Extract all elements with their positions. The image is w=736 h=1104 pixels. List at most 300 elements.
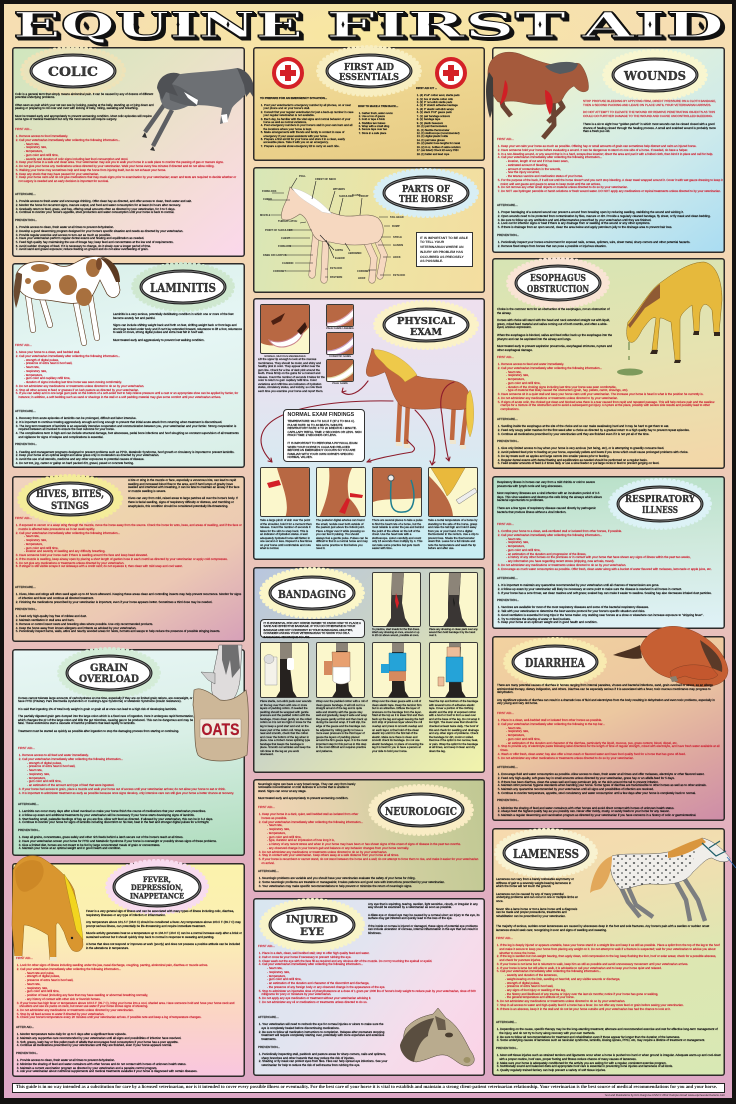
- text: colic aftercare and prevention: 7. Avoid sand and gravel exposure; reduce feeding on ground and do not allow overfeeding of grain.: [16, 247, 149, 251]
- text: wounds first aid: - the tetanus vaccine and medication status of your horse.: [506, 174, 583, 178]
- text: lameness note: The majority of serious, sudden onset lamenesses are caused by abscesses deep in the foot and sole fractures. Any horse's pain with a swollen or sudden onset lameness should seek care; recognizing it soon and signs of swelling and sweating.: [496, 924, 709, 932]
- text: diarrhea intro: Any significant episode of diarrhea can result in a dramatic loss of fluid and electrolytes from the body resulting in dehydration and even toxic problems, especially in very young and very old horse.: [497, 698, 715, 705]
- text: colic intro: [15, 92, 154, 121]
- text: colic first aid: 3. Keep your horse in a safe and clean area. Your veterinarian may ask you to walk your horse in a safe place to monitor the passing of gas or manure signs.: [16, 160, 224, 164]
- text: lameness aftercare and prevention: 2. Be sure to follow all recommendations for treatment and rehabilitation even if those appear far longer than the duration of the lameness.: [497, 1035, 680, 1039]
- badge: esophagus obstruction: [508, 259, 608, 307]
- badge: parts of the horse: [375, 170, 477, 216]
- illustrations: esophagus badge and horse: [492, 258, 725, 469]
- text: fever intro: Any temperature above 101.5 F (38.6 C) should be considered a fever. Any temperature above 103.5 F (39.7 C) may prompt serious illness, can potentially be life-threatening and require immediate treatment.: [86, 920, 241, 928]
- text: respiratory intro: [497, 481, 603, 518]
- text: lameness intro: Lameness can vary from a barely noticeable asymmetry or stiffness of gait to a severely weight-bearing lameness in which the horse will not touch the ground.: [496, 877, 574, 888]
- text: wounds warning: STOP PROFUSE BLEEDING BY APPLYING FIRM, DIRECT PRESSURE ON A CLOTH BANDAGE, THEN A SECOND PACKING AND LEAVE ON PLACE UNTIL YOUR VETERINARIAN ARRIVES.: [583, 99, 716, 107]
- text: fever intro: Muscle activity generates heat so a temperature up to 104.0 F (40.0 C) can be a normal increase early after a brisk or sustained workout but it should quickly drop back to normal in response to sweating and panting.: [86, 931, 242, 939]
- text: diarrhea aftercare and prevention: 1. Minimize the sharing of feed and water containers with other horses and avoid direct contact with horses of unknown health status.: [498, 806, 674, 810]
- diagram: part labels: CHEEK: [263, 197, 272, 201]
- illustrations: lameness badge and horse: [492, 828, 725, 1076]
- text: injured eye first aid: 2. Halt or cross tie your horse if necessary to prevent rubbing the eye.: [259, 955, 351, 959]
- panel: stethoscope exam: [372, 467, 422, 517]
- text: laminitis first aid: [15, 343, 238, 399]
- text: grain overload intro: [18, 696, 194, 733]
- diagram: part labels: POINT OF SHOULDER: [265, 228, 293, 232]
- text: grain overload aftercare and prevention: 1. Laminitis can occur many days after a feed overload so make your horse finish the course of medications that your veterinarian prescribes.: [19, 809, 206, 813]
- text: grain overload first aid: - presence of extra heat in hoof wall,: [27, 764, 75, 768]
- text: leg captions: To practice, start treads for the first dress. Wash any dressing at once, around or up to 20 cm above wound, possible at soon.: [372, 628, 420, 637]
- text: lameness aftercare and prevention: 4. Quality regularly trained farriery can help prevent a variety of soft tissue injuries.: [497, 1068, 606, 1072]
- text: diarrhea first aid: 1. Place in a clean, well-bedded stall or isolated from other horses as possible.: [498, 718, 602, 722]
- text: wounds aftercare and prevention: AFTERCARE...: [497, 203, 518, 207]
- diagram: part labels: CHEST: [281, 236, 290, 240]
- text: neurologic first aid: - a history of any recent stress and when in your horse may have been or has shown signs of the onset of signs of disease in the past two months.: [267, 842, 461, 846]
- text: hives aftercare and prevention: 4. Keep the horse away from known allergens and irritants as advised by your veterinarian.: [16, 626, 136, 630]
- text: diarrhea aftercare and prevention: 2. Always feed the highest quality hay as you possibly can. Never offer moldy, musty, or sandy feeds to your horse for any reason.: [498, 809, 670, 813]
- text: lameness first aid: FIRST AID...: [496, 936, 513, 940]
- text: laminitis first aid: - temperature,: [24, 373, 43, 377]
- text: wounds aftercare and prevention: 3. Be sure to follow up any antibiotics and anti-inflammatories prescribed by your veterinarian until they are finished.: [498, 218, 651, 222]
- badge: fever: DEPRESSION,: [131, 883, 183, 892]
- text: lameness aftercare and prevention: PREVENTION...: [496, 1046, 518, 1050]
- text: emergency preparation: 2. Consult first your regular veterinarian for just a back-up number in case your regular veterinarian is not available.: [261, 110, 353, 117]
- badge: grain overload: [59, 649, 159, 697]
- text: laminitis first aid: FIRST AID...: [15, 343, 32, 347]
- icon: horse head in oat sack: [193, 645, 248, 761]
- diagram: part labels: WITHERS: [333, 187, 345, 191]
- text: esophagus first aid: 5. If signs of acute colic, the choked gut clean and blocked area there is a tear caused from rapid and repeated passage. This will help reduce pain and the swallow cramps for a mixture of the obstruction and to avoid a subsequent gut injury. A rupture at the place, possibly with severe side results and possibly lead to other complications.: [498, 400, 714, 411]
- text: lameness intro: Lameness can be caused by any of many potential underlying problems and can occur in one or multiple limbs at once.: [496, 892, 578, 903]
- icon: yellow horse with feed drool: [617, 262, 722, 376]
- text: fever aftercare and prevention: 3. Maintain a current vaccination program as directed by your veterinarian and a parasite control program.: [17, 1066, 157, 1070]
- text: diarrhea aftercare and prevention: 3. Maintain a regular deworming and vaccination program as directed by your veterinarian if you have concerns in a history of colic or gastrointestinal.: [498, 813, 696, 817]
- badge: respiratory illness: RESPIRATORY: [625, 494, 695, 505]
- text: lameness aftercare and prevention: [496, 1021, 722, 1073]
- text: laminitis aftercare and prevention: 1. Feeding and management programs designed to prevent problems such as PPID, Metabolic Syndrome, hoof growth or circulatory is important to prevent laminitis.: [16, 450, 234, 454]
- badge: wounds: [604, 51, 706, 99]
- text: grain overload intro: It is said that ingesting 1% of total body weight in grain or grain all at once can lead to a high risk of developing laminitis.: [18, 707, 177, 711]
- text: respiratory first aid: 3. Do not administer any medications or treatments unless directed to do so by your veterinarian.: [498, 563, 626, 567]
- diagram: part labels: SHOULDER: [339, 194, 354, 198]
- panel: pastern pulse exam: [316, 467, 366, 517]
- diagram: horse body: [281, 187, 384, 280]
- text: laminitis aftercare and prevention: AFTERCARE...: [15, 409, 36, 413]
- badge: grain overload: GRAIN: [90, 663, 128, 674]
- text: diarrhea aftercare and prevention: 1. Encourage fluid and water consumption as possible. Allow access to clean, fresh water at all times and offer molasses, electrolyte or other flavored water.: [498, 772, 705, 776]
- text: laminitis first aid: - respiratory rate,: [24, 369, 47, 373]
- badge: first aid essentials: FIRST AID: [344, 63, 394, 73]
- text: emergency preparation: 3. Each day, be familiar with the vital signs and normal behavior of your horse as well as normal variations.: [261, 117, 350, 124]
- text: fever aftercare and prevention: 1. Provide access to clean, fresh water at all times to prevent dehydration.: [17, 1058, 115, 1062]
- diagram: part labels: FETLOCK: [330, 266, 342, 270]
- text: laminitis aftercare and prevention: 2. It is important to continue treating aggressively enough and long enough to prevent that initial acute attack from returning when treatment is discontinued.: [16, 420, 222, 424]
- text: fever first aid: - strength of digital pulses,: [25, 974, 60, 978]
- text: colic first aid: 1. Remove access to food immediately.: [16, 134, 68, 138]
- panel: injured eye: [253, 898, 485, 1076]
- text: respiratory aftercare and prevention: PREVENTION...: [497, 598, 519, 602]
- text: colic first aid: - gum color and refill time,: [24, 153, 59, 157]
- badge: esophagus obstruction: ESOPHAGUS: [530, 273, 586, 284]
- text: colic aftercare and prevention: 3. Provide regular exercise and access to turn-out as much as possible.: [16, 233, 111, 237]
- text: fever aftercare and prevention: 4. Ask your veterinarian about nutritional supplements and medical treatments available if your horse is diagnosed with certain diseases.: [17, 1069, 197, 1073]
- text: esophagus aftercare and prevention: 3. Continue all medications prescribed by your veterinarian until they are finished even if it is not yet all of the time.: [498, 432, 649, 436]
- text: injured eye first aid: 4. Call your veterinarian immediately after collecting the following information...: [259, 962, 363, 966]
- text: first aid kit: 17. (as listed) Check kit every PRN: [417, 149, 458, 152]
- text: wounds aftercare and prevention: 5. If there is drainage from an open wound, clean the area below and apply petroleum jelly to the drainage area to prevent hair loss.: [498, 225, 672, 229]
- text: hives first aid: - respiratory rate,: [24, 538, 47, 542]
- text: esophagus first aid: - duration of the choking signs including last time your horse was seen comfortable,: [506, 385, 617, 389]
- callout: normal exam findings: [283, 409, 365, 462]
- text: fever first aid: 2. Call your veterinarian immediately after collecting the following information...: [17, 967, 121, 971]
- text: laminitis first aid: - presence of extra heat in hoof wall,: [24, 361, 72, 365]
- badge: injured eye: [261, 900, 363, 950]
- text: esophagus aftercare and prevention: AFTERCARE...: [497, 417, 518, 421]
- text: grain overload first aid: - respiratory rate,: [27, 772, 50, 776]
- text: esophagus first aid: [497, 356, 721, 412]
- panel: respiratory illness: [492, 476, 725, 629]
- text: hives first aid: - heart rate,: [24, 534, 40, 538]
- text: esophagus first aid: 1. Remove access to feed and water immediately.: [498, 362, 564, 366]
- text: grain overload aftercare and prevention: 1. Keep all grains, concentrates, grass safely and other rich feeds behind a latch secure out of the horse's reach at all times.: [19, 835, 183, 839]
- badge: colic: COLIC: [48, 65, 98, 80]
- text: neurologic first aid: - gum color and refill time,: [267, 835, 302, 839]
- text: colic first aid: - heart rate,: [24, 142, 40, 146]
- text: neurologic aftercare: 2. Some neurologic problems are treatable or manageable; it takes patience and good care with instructions prescribed by your veterinarian.: [259, 880, 445, 884]
- title: FIRST: [326, 5, 566, 46]
- text: laminitis first aid: - strength of digital pulses,: [24, 358, 59, 362]
- text: respiratory aftercare and prevention: AFTERCARE...: [497, 576, 518, 580]
- badge: first aid essentials: [318, 47, 420, 95]
- text: hives aftercare and prevention: 5. Periodically inspect barns, walls, attics and nearby wooded areas for nests, hornets and wasps to help reduce the presence of possible stinging insects.: [16, 629, 220, 633]
- panel: neurologic: [253, 779, 485, 892]
- text: how to make a trim pack: 6. Secure tape over two: [359, 128, 387, 131]
- text: neurologic first aid: [258, 805, 478, 865]
- text: colic first aid: - severity and duration of colic signs including last food consumption and stool.: [24, 157, 128, 161]
- text: neurologic intro: Neurologic signs can have a very broad range. They can vary from barely noticeable incoordination or mild dullness to a horse that is unable to stand. Signs can occur at any stage.: [258, 782, 356, 793]
- text: wounds warning: DO NOT ATTEMPT TO ELEVATE THE WOUND OR REMOVE PENETRATING OBJECTS AS THIS COULD DO FURTHER DAMAGE TO THE WOUND AND CAUSE UNCONTROLLED BLEEDING.: [583, 110, 715, 118]
- text: lameness first aid: - strength of digital pulses,: [505, 980, 540, 984]
- text: injured eye aftercare and prevention: 2. Shading or fly mask can protect eyes from flies. Flies can help spread eye infections. See your veterinarian for help to reduce the risk of self-trauma from rubbing the eye.: [259, 1059, 387, 1067]
- title: AID: [580, 5, 724, 46]
- panel: diarrhea: [492, 636, 725, 821]
- panel: tape step: [429, 642, 478, 698]
- text: laminitis aftercare and prevention: 3. Avoid the use of all steroids, medicine and any other exposures to potential causes of disease.: [16, 457, 144, 461]
- text: fever aftercare and prevention: 2. Minimize the sharing of feed and water containers with other horses and do not contact with horses of unknown health status.: [17, 1062, 186, 1066]
- text: individual normals: IT IS IMPORTANT TO PERFORM A PHYSICAL EXAM WHEN YOUR HORSE IS CALM AND RELAXED BEFORE AN EMERGENCY OCCURS SO YOU ARE FAMILIAR WITH YOUR OWN HORSE'S SPECIFIC NORMAL VALUES.: [288, 441, 357, 459]
- text: hives intro: A bite or sting in the muzzle or face, especially a venomous bite, can lead to rapid swelling and increased blood flow to the area, and if hard lumps of gravity have swelled and interfered with breathing, it can be fatal to maintain an airway if the face or muzzle swelling is severe.: [128, 478, 239, 493]
- badge: neurologic: NEUROLOGIC: [385, 805, 457, 818]
- text: grain overload aftercare and prevention: 2. Have your veterinarian screen your horse for PPID and Metabolic Syndrome if your horse is overweight or possibly shows signs of these problems.: [19, 839, 217, 843]
- text: colic first aid: 6. Keep any stools that may have passed for your veterinarian.: [16, 172, 99, 176]
- text: hives first aid: - gum color and refill time,: [24, 546, 59, 550]
- text: grain overload aftercare and prevention: 2. A follow-up exam and additional treatments by your veterinarian will be necessary if your horse starts developing signs of laminitis.: [19, 813, 195, 817]
- text: first aid kit: 8. (1) bandage tape: [417, 118, 440, 121]
- text: colic aftercare and prevention: 5. Feed high quality hay maintaining the use of forage hay; keep feed and concentrates at the low end of requirements.: [16, 240, 174, 244]
- text: fever first aid: - gum color and refill time,: [25, 989, 60, 993]
- text: laminitis first aid: - duration of signs including last time horse was seen moving comfortably.: [24, 380, 122, 384]
- text: colic first aid: FIRST AID...: [15, 127, 32, 131]
- illustrations: diarrhea badge and lying horse: [492, 636, 725, 821]
- text: esophagus aftercare and prevention: 5. Feed smaller amounts of feed 2-3 times daily or use a slow feeder or put large rocks in feed to prevent gorging on feed.: [498, 461, 659, 465]
- badge: laminitis: LAMINITIS: [150, 280, 216, 295]
- text: lameness first aid: - presence of extra heat in hoof wall,: [505, 984, 553, 988]
- text: lameness first aid: 5. Call your veterinarian immediately after collecting the following information...: [497, 969, 601, 973]
- diagram: part labels: CROUP: [359, 194, 369, 198]
- text: pastern pulse caption: The posterior digital arteries can found the small, nodule near both outside of the pastern just above the fetlock joint. Place a finger over it while pressing so you can feel it pulsing. You should always feel a gentle pulse. Pulses can be difficult to find in a normal horse and may take some practice to find before you need it.: [316, 518, 368, 550]
- badge: diarrhea: DIARRHEA: [525, 656, 586, 670]
- text: grain overload aftercare and prevention: 4. Maintain your horse at an optimal weight and in good health and condition.: [19, 846, 121, 850]
- text: colic aftercare and prevention: 6. Avoid sudden changes of feed. If it is necessary to change, do it slowly over a longer period of time.: [16, 244, 151, 248]
- text: fever aftercare and prevention: AFTER AID...: [16, 1025, 34, 1029]
- caption: gum views: PALE GUMS: [332, 382, 348, 385]
- panel: padding step: [260, 642, 309, 698]
- panel: wounded leg: [372, 572, 421, 627]
- text: esophagus first aid: - temperature,: [506, 377, 525, 381]
- text: respiratory first aid: - temperature,: [506, 544, 525, 548]
- text: laminitis aftercare and prevention: PREVENTION...: [15, 442, 37, 446]
- text: hives aftercare and prevention: 2. Maintain ventilation in stall area and barn.: [16, 618, 74, 622]
- text: hives aftercare and prevention: AFTERCARE...: [15, 585, 36, 589]
- text: diarrhea first aid: 3. Stop to provide any of electrolyte paste following label directions for the length of time of regular strength, mixed with electrolyte, and have fresh water available at all times.: [498, 744, 720, 752]
- text: neurologic first aid: - type, duration and an impression of how long it is,: [267, 838, 335, 842]
- text: diarrhea first aid: - temperature,: [506, 733, 525, 737]
- text: esophagus aftercare and prevention: 1. Swelling inside the esophagus at the site of the choke and so can make swallowing hard and it may be hard to get them to eat.: [498, 424, 669, 428]
- text: diarrhea aftercare and prevention: 3. If there has been diarrhea, clean the areas well and keep petroleum jelly on the skin around the tail to prevent irritation.: [498, 780, 659, 784]
- text: hives first aid: 4. If the muzzle is swelling, keep airway open by placing a short length of garden hose in each nostril as directed by your veterinarian or apply cold compresses.: [16, 557, 228, 561]
- text: hives aftercare and prevention: PREVENTION...: [15, 607, 37, 611]
- text: injured eye aftercare and prevention: AFTERCARE...: [258, 1015, 279, 1019]
- text: diarrhea first aid: 5. Do not administer any other medications or treatments unless directed to do so by your veterinarian.: [498, 756, 634, 760]
- text: respiratory aftercare and prevention: 2. Talk with your veterinarian to determine the best vaccine protocol for your horse's specific situation and risks.: [498, 609, 645, 613]
- panel: cleaned leg: [429, 572, 478, 627]
- text: grain overload first aid: 3. If your horse had access to grain, place a muzzle and walk your horse out of access until your veterinarian arrives; do not allow your horse to eat or drink.: [19, 787, 226, 791]
- text: neurologic intro: [258, 782, 356, 800]
- text: diarrhea aftercare and prevention: PREVENTION...: [497, 798, 519, 802]
- text: injured eye intro: A dilate eye or closed eye may be caused by a corneal ulcer; an injury to the eye, its surface may get infected and quickly lead to the loss of the eye.: [368, 913, 480, 920]
- illustration: chestnut horse: [366, 348, 474, 449]
- footer disclaimer: This guide is in no way intended as a substitution for care by a licensed veterinarian, nor is it intended to cover every possible illness or eventuality. For the best care of your horse it is vital to establish and maintain a strong client-patient veterinarian relationship. Your veterinarian is the best source of medical recommendations for you and your horse.: [16, 1085, 717, 1090]
- text: respiratory aftercare and prevention: 1. It is important to maintain any quarantine recommended by your veterinarian until all chances of transmission are gone.: [498, 583, 659, 587]
- diagram: part labels: HOCK: [393, 255, 401, 259]
- title: [13, 5, 726, 46]
- text: laminitis first aid: 1. Move your horse to a clean, well bedded stall.: [16, 350, 80, 354]
- text: colic first aid: 5. Walking your horse may sometimes help and keep the horse from injuring itself, but do not exhaust your horse.: [16, 168, 166, 172]
- badge: injured eye: EYE: [300, 926, 324, 938]
- text: respiratory first aid: - gum color and refill time,: [506, 548, 541, 552]
- badge: hives: STINGS: [51, 501, 89, 512]
- badge: diarrhea: [505, 639, 605, 685]
- text: wounds first aid: - estimated amount of bleeding,: [506, 163, 548, 167]
- text: colic first aid: 4. Do not give your horse any medications unless directed by your veterinarian. Walk your horse every few minutes if directed and do not allow rolling.: [16, 164, 214, 168]
- text: first aid kit: 5. (4) 3" elastic self-stick wraps: [417, 108, 454, 111]
- badge: fever: [107, 861, 207, 913]
- text: laminitis intro: Signs can include shifting weight back and forth on feet, shifting weight back or front legs and short legs tucked under body and if can't lay extended forward, reluctance to lift a foot, reluctance to walk or move, strong digital pulses and extra heat felt in hoof wall.: [113, 323, 242, 334]
- text: colic aftercare and prevention: 3. Gradually return to feed, grass, and hay, offering small amounts often as directed by your veterinarian, for 3 to 5 days.: [16, 207, 175, 211]
- text: lameness first aid: - weight-bearing on the limb, swelling or heat felt, and any visible wounds or discharge,: [505, 977, 620, 981]
- text: grain overload intro: Treatment must be started as quickly as possible after ingestion to stop the damaging process from starting or continuing.: [18, 729, 179, 733]
- diagram: part labels: TAIL HEAD: [390, 215, 404, 219]
- text: esophagus first aid: FIRST AID...: [497, 355, 514, 359]
- text: respiratory first aid: 1. Confine your horse to a clean, well-ventilated stall or isolated from other horses, if possible.: [498, 529, 622, 533]
- text: diarrhea aftercare and prevention: 5. Maintain any quarantine recommended by your veterinarian until all signs and possibilities of infection are resolved.: [498, 787, 654, 791]
- badge: neurologic: [368, 784, 474, 836]
- badge: colic: [22, 48, 124, 94]
- text: injured eye first aid: - temperature,: [267, 974, 286, 978]
- text: fever first aid: [16, 956, 234, 1019]
- text: emergency preparation: 4. Post emergency numbers in your horse's stall in your own barn and all the locations where your horse is kept.: [261, 123, 352, 131]
- text: how to make a trim pack: 2. Use a box of gauze: [359, 115, 385, 118]
- text: wounds first aid: - how the injury occurred,: [506, 170, 540, 174]
- text: grain overload aftercare and prevention: PREVENTION...: [18, 828, 40, 832]
- text: hives first aid: [15, 516, 242, 568]
- text: colic aftercare and prevention: 1. Provide access to fresh water and encourage drinking. Offer clean hay as directed, and offer access to clean, fresh water and salt.: [16, 199, 192, 203]
- text: injured eye aftercare and prevention: PREVENTION...: [258, 1044, 280, 1048]
- text: hives aftercare and prevention: 2. Finishing the medications prescribed by your veterinarian is important, even if your horse appears better. Sometimes a third dose may be needed.: [16, 600, 212, 604]
- badge: esophagus obstruction: OBSTRUCTION: [527, 284, 589, 295]
- text: colic aftercare and prevention: 2. Monitor the horse for recurrent signs, manure output, and food and water consumption for at least 24 hours after recovery.: [16, 203, 181, 207]
- diagram: part labels: GASKIN: [393, 243, 403, 247]
- panel: gum view two: [326, 332, 354, 355]
- text: wounds first aid: 1. Keep your vet calm your horse as much as possible. Offering hay or small amounts of grain can sometimes help distract and calm an injured horse.: [498, 144, 697, 148]
- text: wounds first aid: 6. Do not remove any other small objects or material unless directed to do so by your veterinarian.: [498, 185, 628, 189]
- text: colic intro: Colic is a general term that simply means abdominal pain. It can be caused by any of dozens of different potential underlying problems.: [15, 92, 153, 99]
- text: injured eye first aid: 1. Place in a dark, clean, well bedded stall; stop to offer high quality feed and water.: [259, 951, 369, 955]
- panel: laminitis: [12, 263, 245, 468]
- callout: bandaging warning: IT IS ESSENTIAL FOR ANY HORSE OWNER TO KNOW HOW TO PLACE A SAFE AND EFFECTIVE BANDAGE. IF YOU DO OTHERWISE IN YOUR BANDAGE ARE NOT CONFIDENT IN YOUR BANDAGING ABILITIES, CONSIDER ASKING YOUR VETERINARIAN TO SHOW YOU OR A BANDAGING TECHNIQUE TO USE.: [264, 620, 361, 638]
- text: laminitis aftercare and prevention: 1. Recovery from acute episodes of laminitis can be prolonged, difficult and labor intensive.: [16, 416, 136, 420]
- text: lameness first aid: - the general temperature and attitude of your horse.: [505, 995, 575, 999]
- text: lameness intro: [496, 878, 578, 922]
- text: lameness aftercare and prevention: 2. Make sure your horse is adequately conditioned for the activity you are asking for with a regular, consistent exercise program.: [497, 1061, 667, 1065]
- panel: gum view one: [326, 304, 354, 327]
- text: neurologic aftercare: [258, 869, 445, 888]
- text: first aid kit: 16. (2) 8 oz. bottles of saline solution: [417, 146, 461, 149]
- text: esophagus aftercare and prevention: 3. Do lay treats such as apples and large carrots into smaller pieces prior to feeding.: [498, 454, 610, 458]
- text: hives intro: Hives can vary from mild, raised areas to large patches all over the horse's body. If there is facial swelling, signs of respiratory difficulty or distress, and trembling or anaphylaxis, this condition should be considered potentially life-threatening.: [128, 496, 238, 508]
- panel: esophagus obstruction: [492, 258, 725, 469]
- text: injured eye intro: Any eye that is squinting, tearing, swollen, light sensitive, cloudy, or irregular in any way should be examined by a veterinarian as soon as possible.: [368, 902, 478, 909]
- text: lameness aftercare and prevention: AFTERCARE...: [496, 1020, 517, 1024]
- text: respiratory aftercare and prevention: 4. Try to minimize the sharing of water or feed buckets.: [498, 617, 571, 621]
- text: diarrhea aftercare and prevention: 4. Maintain strict personal hygiene standards when handling your horse. Some types of diarrhea are transmissible to other horses as well as to other animals.: [498, 783, 707, 787]
- text: neurologic first aid: horses as possible.: [261, 816, 287, 820]
- text: lameness first aid: [496, 937, 722, 1011]
- text: colic first aid: - respiratory rate,: [24, 145, 47, 149]
- text: laminitis intro: Laminitis is a very serious, potentially debilitating condition in which one or more of the feet become acutely hot and painful.: [113, 312, 233, 320]
- text: first aid kit: [416, 87, 461, 156]
- diagram: part labels: CORONET: [273, 269, 286, 273]
- text: fever first aid: - respiratory rate,: [25, 986, 48, 990]
- text: injured eye first aid: 5. Stop to administer an injectable dose of phenylbutazone at a dose of 1 gram per 1000 lbs of horse's body weight to reduce pain by your veterinarian, dose of 500 milligrams for pony or miniature by your veterinarian.: [259, 988, 476, 996]
- text: esophagus aftercare and prevention: 1. Give only limited access to hay when your horse is very anxious (not being, etc), or is attempting to greedily consume feed.: [498, 446, 664, 450]
- text: wounds aftercare and prevention: 2. Remove fixed straps from horses that can pose a possible or injurious situation.: [498, 244, 607, 248]
- text: fever intro: Fever is a very general sign of illness and can be associated with many types of illness including colic, diarrhea, respiratory illnesses or any type of infection or inflammation.: [86, 909, 234, 917]
- text: emergency preparation: TO PREPARE FOR AN EMERGENCY SITUATION...: [260, 96, 327, 100]
- text: first aid kit: 3. (2) 3" non-stick sterile pads: [417, 101, 452, 104]
- text: first aid kit: 11. (1) flexible thermometer: [417, 129, 449, 132]
- text: neurologic first aid: - respiratory rate,: [267, 827, 290, 831]
- text: neurologic first aid: - heart rate,: [267, 823, 283, 827]
- text: esophagus first aid: - respiratory rate,: [506, 373, 529, 377]
- text: colic aftercare and prevention: PREVENTION...: [15, 218, 37, 222]
- text: colic first aid: - temperature,: [24, 149, 43, 153]
- badge: respiratory illness: ILLNESS: [642, 505, 678, 516]
- text: esophagus aftercare and prevention: 4. Regular dental exams with dental floating and equilibration as needed should be performed on a regular basis.: [498, 458, 648, 462]
- illustrations: grain overload badge and oat sack: [57, 644, 249, 762]
- text: first aid kit: 4. (1) 6" stretch adhesive bandage: [417, 104, 458, 107]
- text: fever first aid: - any history of contact with other sick or feverish horses.: [25, 997, 101, 1001]
- text: first aid kit: 9. (1) plastic tweezers: [417, 122, 443, 125]
- text: hives first aid: 5. Do not give any medications or treatments unless directed by your veterinarian.: [16, 560, 124, 564]
- text: diarrhea intro: [497, 684, 721, 710]
- text: colic aftercare and prevention: 4. Continue to monitor your horse's appetite, stool production and water consumption until your horse is back to normal.: [16, 210, 174, 214]
- text: colic first aid: 7. Keep your horse calm and do not give medications that may mask signs prior to examination by your veterinarian; exam and tests are required to decide whether or not surgery is needed and an early decision is important for survival.: [16, 175, 236, 183]
- arrows: exam pointers: [261, 381, 454, 465]
- text: first aid kit: 2. (1) box of sterile cotton rolls: [417, 98, 453, 100]
- text: injured eye aftercare and prevention: 2. Be sure to follow all medication instructions to completion. Relapse after premature stopping treatment will require completely starting over, potentially with more expensive and extensive treatments.: [259, 1030, 384, 1041]
- panel: gum view three: [326, 359, 354, 382]
- text: wounds first aid: 3. In a non-bleeding wound, or any wound that is in a hard, scrape-free location; direct the area and pad it with a folded cloth, then bind it in place and call for help.: [498, 152, 713, 156]
- diagram: part labels: ABDOMEN: [348, 251, 362, 255]
- text: neurologic first aid: 5. If your horse is recumbent or cannot stand, do not stand between the horse and a wall; do not attempt to force them to rise, and make it easier for your veterinarian on arrival.: [259, 857, 478, 865]
- icon: red cross: [437, 59, 465, 87]
- text: lameness aftercare and prevention: 1. Most soft tissue injuries such as strained tendons and ligaments occur when a horse is pushed too hard or when ground is irregular. Adequate warm-up and cool-down with a proper routine, hoof care, proper footing and fitness reduce chance of many causes of lameness.: [497, 1053, 721, 1061]
- text: grain overload first aid: [18, 746, 234, 795]
- text: esophagus first aid: 4. Do not administer any medications or treatments unless directed to by your veterinarian.: [498, 396, 618, 400]
- illustrations: laminitis badge and horse: [14, 256, 235, 346]
- text: esophagus first aid: 3. Have someone sit in a quiet stall and keep your horse calm until your veterinarian. The increase your horse is head in what is the position he currently is.: [498, 392, 704, 396]
- text: neurologic first aid: - temperature,: [267, 831, 286, 835]
- text: diarrhea first aid: 4. Wash or offer fresh, clean water; hay also offer a bran mash or flavored water and have food quality food for a horse that has gone off-feed.: [498, 752, 686, 756]
- text: emergency preparation: [260, 96, 354, 148]
- text: respiratory first aid: - an estimation of the duration and progression of the illness,: [506, 552, 586, 556]
- text: respiratory first aid: - a history of any other horses on the premises or in contact with your horse that have shown any signs of illness within the past two weeks,: [506, 555, 691, 559]
- text: injured eye first aid: - the presence of any foreign body or any observed change in the appearance of the eye.: [267, 985, 385, 989]
- text: diarrhea first aid: - heart rate,: [506, 726, 522, 730]
- text: fever intro: A horse that does not respond or improves at work (poorly) and does not possess a positive attitude can be included in the alterations in temperature.: [86, 942, 240, 950]
- text: injured eye first aid: [258, 944, 476, 1004]
- illustrations: injured eye badge and horse head: [259, 898, 474, 1066]
- text: respiratory aftercare and prevention: 1. Vaccines are available for most of the most respiratory diseases and some of the bacterial respiratory diseases.: [498, 605, 649, 609]
- text: fever aftercare and prevention: 2. Maintain any supportive care recommended by your veterinarian until all signs and possibilities of infection have resolved.: [17, 1036, 181, 1040]
- text: esophagus intro: [497, 308, 613, 356]
- text: diarrhea first aid: [497, 712, 721, 760]
- text: diarrhea first aid: - an estimation of the duration and character of the diarrhea, particularly the liquid, mucous, pus, grass content, blood, dispel, etc.: [506, 741, 677, 745]
- text: grain overload first aid: 2. Call your veterinarian immediately after collecting the following information...: [19, 757, 123, 761]
- text: neurologic first aid: FIRST AID...: [258, 805, 275, 809]
- text: laminitis first aid: - heart rate,: [24, 365, 40, 369]
- icon: horse lying down: [613, 626, 728, 687]
- text: fever aftercare and prevention: 4. Continue all medications prescribed by your veterinarian until they are finished, even if your horse appears normal.: [17, 1043, 172, 1047]
- icon: grey horse in colic pose: [142, 68, 255, 151]
- icon: paint horse: [14, 256, 120, 343]
- text: esophagus intro: Choke is the common term for an obstruction of the esophagus, not an obstruction of the airway.: [497, 307, 610, 315]
- text: laminitis intro: [113, 312, 242, 342]
- text: fever aftercare and prevention: PREVENTION...: [16, 1051, 38, 1055]
- text: lameness first aid: - any signs of foot injury or swelling of the leg,: [505, 988, 566, 992]
- text: esophagus aftercare and prevention: 2. Feed only soupy pellet mashes for the first week after a choke as directed by a gradual return to a high quality hay to prevent repeat episodes.: [498, 428, 690, 432]
- diagram: part labels: POLL: [299, 174, 306, 178]
- text: injured eye first aid: 7. Do not administer any oil or medications or treatments unless directed to do so.: [259, 1000, 367, 1004]
- diagram: part labels: KNEE OR CARPUS: [263, 253, 287, 257]
- text: emergency preparation: 7. Prepare a special show emergency kit to carry on each ride.: [261, 144, 340, 148]
- text: colic aftercare and prevention: 1. Provide access to clean, fresh water at all times to prevent dehydration.: [16, 225, 114, 229]
- text: fever first aid: 3. If your horse has high fever or temperature above 103.5 F (39.7 C), bring your horse into a cool, shaded area. Have someone hold and hose your horse neck and shoulders and use ice packs on neck, but never use water if your horse shows signs of shivering.: [17, 1000, 234, 1008]
- panel: hives, bites, stings: [12, 476, 245, 642]
- diagram: part labels: CANNON: [282, 261, 294, 265]
- text: neurologic first aid: 3. Do not administer any medications or treatments unless directed to do so by your veterinarian.: [259, 850, 387, 854]
- diagram: part labels: MUZZLE: [260, 213, 271, 217]
- text: hives aftercare and prevention: 3. Remove or control insect nests and breeding sites where possible. Use only recommended products.: [16, 622, 153, 626]
- text: grain overload first aid: - an estimation of the amount and type of feed that were ingested.: [27, 783, 114, 787]
- text: neurologic aftercare: AFTERCARE...: [258, 869, 279, 873]
